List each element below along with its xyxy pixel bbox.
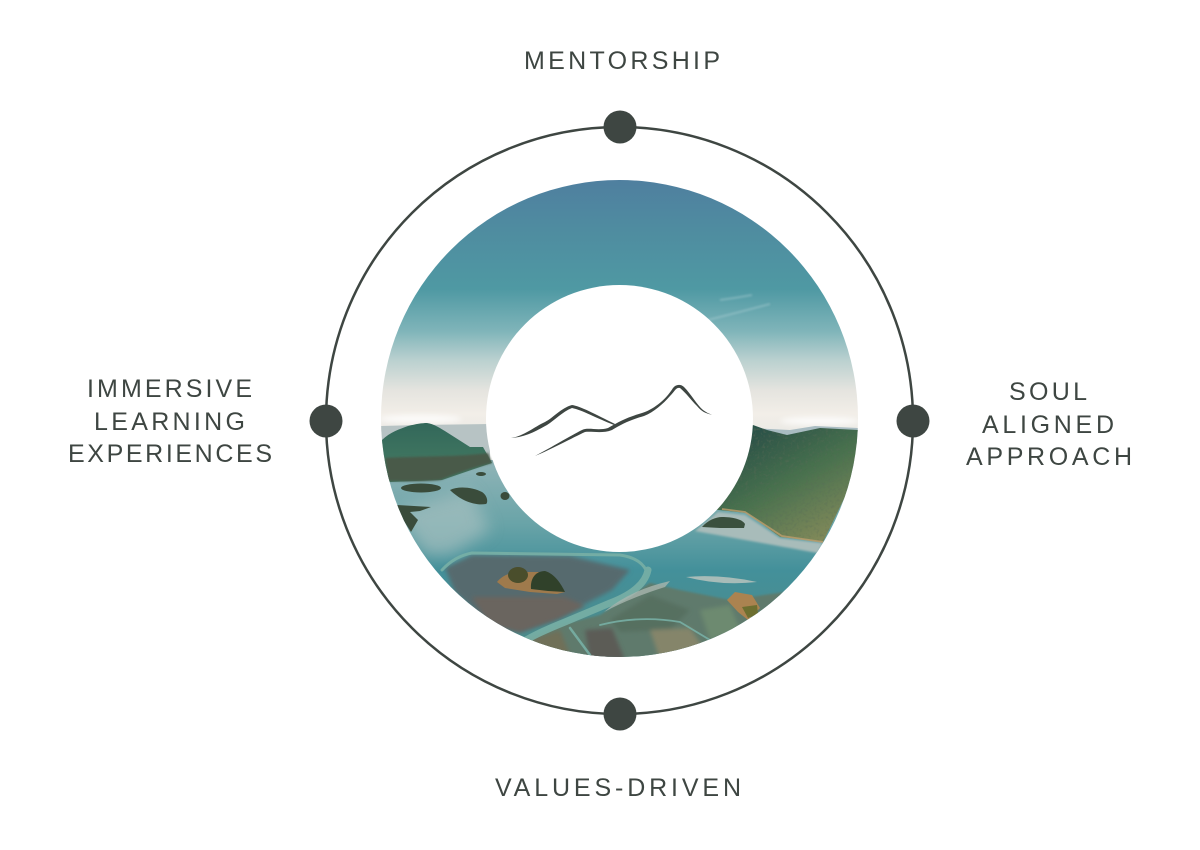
orange islet bbox=[727, 592, 760, 620]
beach strip bbox=[722, 509, 823, 542]
inner white circle bbox=[486, 285, 753, 552]
icon: mountain logo bbox=[511, 385, 712, 456]
right mountain bbox=[716, 425, 858, 542]
central islands bbox=[497, 572, 565, 594]
left mountain bbox=[381, 423, 492, 482]
distant hills bbox=[381, 424, 490, 462]
clouds bbox=[378, 415, 860, 425]
left islands bbox=[397, 472, 510, 532]
label: soul aligned approach: ALIGNED bbox=[982, 411, 1114, 439]
water bbox=[380, 460, 860, 660]
brown lower flat bbox=[472, 597, 585, 632]
label: mentorship: MENTORSHIP bbox=[524, 47, 720, 75]
node: right bbox=[896, 404, 930, 438]
bottom marsh land bbox=[528, 582, 784, 657]
pale left shallows bbox=[395, 490, 490, 555]
node: left bbox=[310, 404, 342, 438]
sky bbox=[380, 180, 860, 450]
outer ring bbox=[326, 127, 913, 714]
marsh patches bbox=[530, 595, 740, 660]
label: immersive learning experiences: EXPERIENCES bbox=[68, 440, 272, 468]
left shore forest bbox=[385, 453, 492, 481]
wispy high clouds bbox=[708, 295, 770, 320]
node: top bbox=[604, 110, 636, 144]
pale sandbar bbox=[686, 576, 757, 583]
river channel bbox=[442, 553, 710, 655]
label: immersive learning experiences: IMMERSIVE bbox=[87, 375, 252, 403]
circular diagram bbox=[70, 51, 1130, 796]
label: soul aligned approach bbox=[966, 378, 1132, 471]
landscape photo ring bbox=[378, 180, 860, 665]
label: soul aligned approach: APPROACH bbox=[966, 443, 1132, 471]
label: immersive learning experiences bbox=[68, 375, 272, 468]
label: immersive learning experiences: LEARNING bbox=[94, 408, 245, 436]
small right island bbox=[702, 517, 745, 528]
right sand flat bbox=[695, 512, 823, 553]
label: values-driven: VALUES-DRIVEN bbox=[495, 774, 741, 802]
mudflat bbox=[445, 555, 630, 632]
node: bottom bbox=[604, 698, 636, 730]
label: soul aligned approach: SOUL bbox=[1009, 378, 1087, 406]
